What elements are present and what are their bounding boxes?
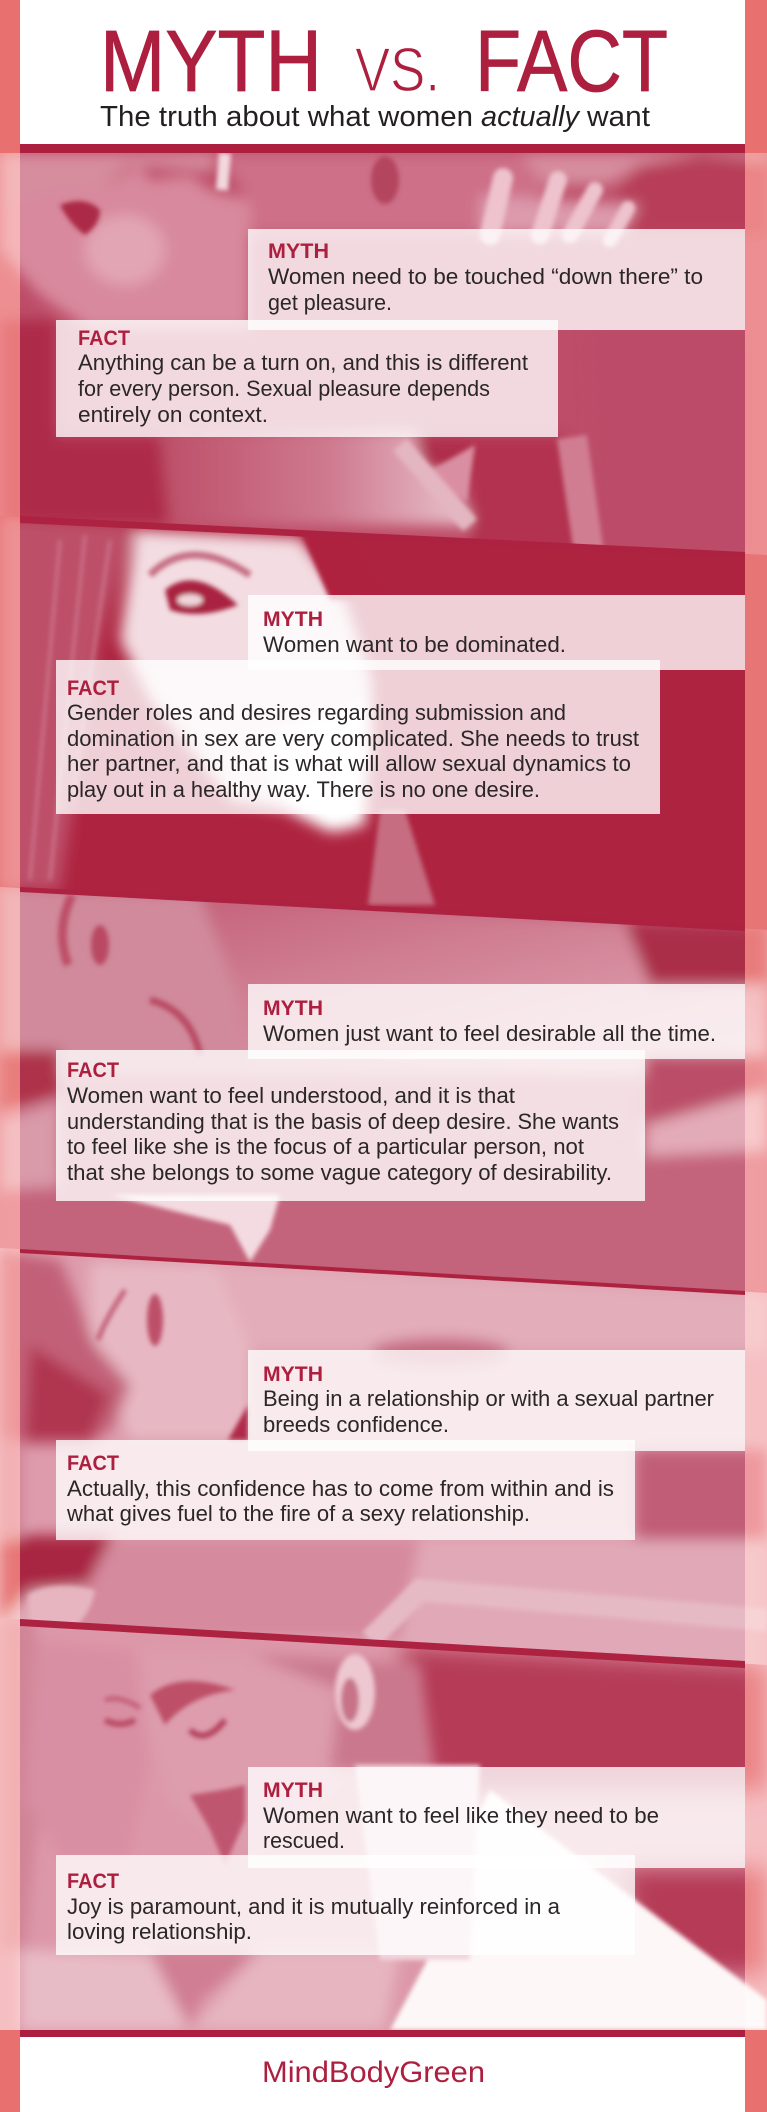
panel: myth 5: Women want to feel like they need to be [263,1803,659,1828]
panel: fact 1 [56,320,558,437]
panel: fact 4 [56,1440,635,1540]
panel: fact 2: play out in a healthy way. There is no one desire. [67,777,540,802]
panel: fact 2 [56,660,660,814]
panel: fact 3: understanding that is the basis of deep desire. She wants [67,1109,619,1134]
panel: myth 1: get pleasure. [268,290,392,315]
panel: fact 3: to feel like she is the focus of a particular person, not [67,1134,585,1159]
title [100,13,668,110]
divider 4 [20,1619,745,1668]
panel: myth 1 [248,229,745,330]
panel: myth 4: Being in a relationship or with a sexual partner [263,1386,714,1411]
panel: myth 5: rescued. [263,1828,345,1853]
panel: fact 2: Gender roles and desires regarding submission and [67,700,566,725]
panel: fact 3: Women want to feel understood, and it is that [67,1083,516,1108]
panel: myth 4 [248,1350,745,1451]
panel: fact 4: what gives fuel to the fire of a sexy relationship. [66,1501,530,1526]
panel: myth 3: Women just want to feel desirable all the time. [263,1021,716,1046]
panel: myth 2: Women want to be dominated. [263,632,566,657]
panel: myth 1: MYTH [268,240,329,263]
subtitle: actually [481,101,580,133]
panel: fact 5: loving relationship. [67,1919,252,1944]
title: FACT [475,13,668,110]
photo 5: couple forehead to forehead [0,1615,767,2035]
right side strip [745,153,767,2030]
panel: fact 5: Joy is paramount, and it is mutually reinforced in a [67,1894,560,1919]
panel: fact 1: Anything can be a turn on, and this is different [78,350,529,375]
panel: fact 3 [56,1050,645,1201]
photo 4: kissing couple close up [0,1245,767,1675]
panel: myth 1: Women need to be touched “down there” to [268,264,703,289]
left side strip [0,153,20,2030]
panel: fact 3: that she belongs to some vague category of desirability. [67,1160,612,1185]
footer brand: MindBodyGreen: MindBodyGreen [262,2056,485,2089]
panel: myth 5 [248,1767,745,1868]
divider 3 [20,1249,745,1295]
panel: fact 2: FACT [67,677,119,700]
subtitle: want [586,101,650,133]
title: VS. [355,36,440,105]
divider 2 [20,887,745,931]
panel: fact 5: FACT [67,1870,119,1893]
panel: fact 1: FACT [78,327,130,350]
panel: myth 4: MYTH [263,1363,323,1386]
panel: fact 3: FACT [67,1059,119,1082]
panel: fact 1: for every person. Sexual pleasure depends [78,376,490,401]
header band [0,0,767,153]
panel: myth 5: MYTH [263,1779,323,1802]
panel: myth 3: MYTH [263,997,323,1020]
panel: fact 2: her partner, and that is what will allow sexual dynamics to [67,751,631,776]
subtitle: The truth about what women [100,101,473,133]
panel: fact 4: Actually, this confidence has to come from within and is [67,1476,614,1501]
photo 2: woman looking up [0,515,767,935]
subtitle [100,101,650,133]
photo 3: woman on sand [0,885,767,1300]
panel: fact 1: entirely on context. [78,402,268,427]
panel: myth 2 [248,595,745,670]
title: MYTH [100,13,322,110]
panel: fact 5 [56,1855,635,1955]
panel: myth 2: MYTH [263,608,323,631]
footer band [0,2030,767,2112]
divider 1 [20,516,745,558]
panel: myth 3 [248,984,745,1059]
panel: myth 4: breeds confidence. [263,1412,449,1437]
panel: fact 4: FACT [67,1452,119,1475]
panel: fact 2: domination in sex are very complicated. She needs to trust [67,726,640,751]
photo 1: couple kissing neck [0,153,767,565]
